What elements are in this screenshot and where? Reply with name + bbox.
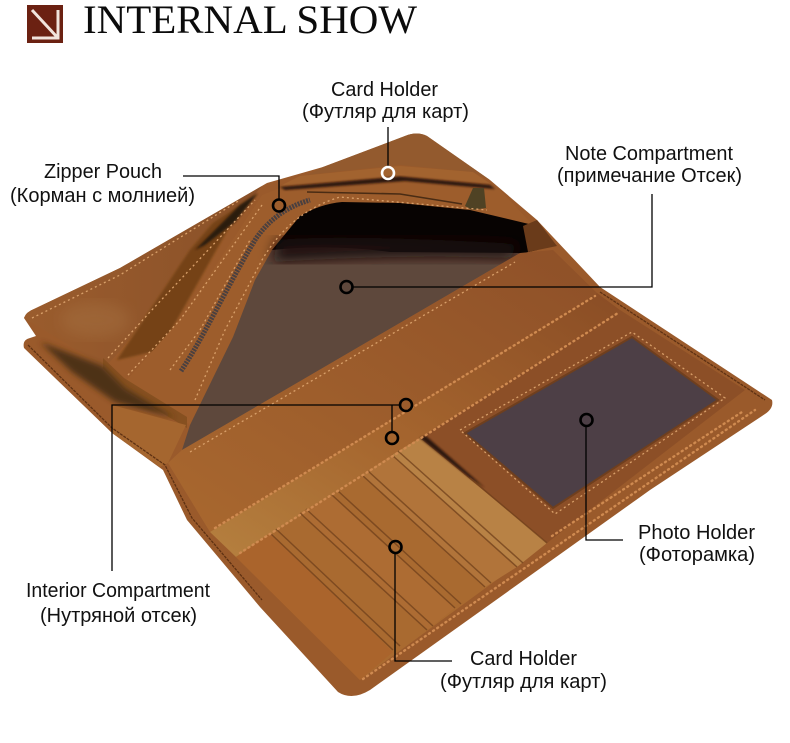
card tier edges xyxy=(270,451,547,650)
lining xyxy=(182,247,520,450)
label: note compartment xyxy=(557,143,742,187)
shadow under fold xyxy=(40,342,175,418)
card tier 1 xyxy=(236,533,393,680)
right fold tab xyxy=(523,220,557,252)
callout: note compartment xyxy=(340,194,652,293)
left flap light patch xyxy=(60,302,130,338)
top card slit xyxy=(280,176,495,190)
label: card holder bottom xyxy=(440,648,607,693)
lining shadow blend xyxy=(272,238,520,262)
zipper pull xyxy=(465,188,486,210)
label: card holder bottom: (Футляр для карт) xyxy=(440,671,607,693)
label: note compartment: (примечание Отсек) xyxy=(557,165,742,187)
zipper xyxy=(181,200,310,371)
wallet body silhouette xyxy=(24,134,772,696)
fold ridge xyxy=(103,358,187,428)
label: zipper pouch: Zipper Pouch xyxy=(44,161,162,183)
label: zipper pouch xyxy=(10,161,195,207)
card tier 3 xyxy=(300,495,455,630)
top back flap xyxy=(307,134,490,180)
label: interior compartment: (Нутряной отсек) xyxy=(40,605,197,627)
left pocket deep crease xyxy=(195,193,258,250)
callout: photo holder xyxy=(580,414,623,540)
left pocket band dark xyxy=(117,195,255,360)
card tier 6 (lightest) xyxy=(392,438,547,567)
label: photo holder: (Фоторамка) xyxy=(639,544,755,566)
callout: card holder bottom xyxy=(390,541,452,661)
window slit xyxy=(420,436,485,488)
label: interior compartment: Interior Compartment xyxy=(26,580,210,602)
fold lower panel xyxy=(112,405,186,467)
strip xyxy=(210,293,620,557)
label: card holder top: Card Holder xyxy=(331,79,438,101)
stitching xyxy=(32,197,755,679)
middle panel xyxy=(168,250,597,532)
shadow interior xyxy=(272,202,537,256)
callout: card holder top xyxy=(382,127,394,179)
label: photo holder: Photo Holder xyxy=(638,522,755,544)
right frame xyxy=(420,310,745,543)
label: photo holder xyxy=(638,522,755,566)
label: card holder bottom: Card Holder xyxy=(470,648,577,670)
label: card holder top xyxy=(302,79,469,123)
callout: zipper pouch xyxy=(183,176,285,212)
label: interior compartment xyxy=(26,580,210,627)
zipper track xyxy=(307,192,462,204)
label: note compartment: Note Compartment xyxy=(565,143,733,165)
left outer flap xyxy=(24,186,262,366)
label: card holder top: (Футляр для карт) xyxy=(302,101,469,123)
card slots xyxy=(236,438,547,680)
wallet illustration xyxy=(24,134,772,696)
zipper flap xyxy=(125,178,533,425)
label: zipper pouch: (Корман с молнией) xyxy=(10,185,195,207)
outer seam xyxy=(28,292,765,600)
card tier 5 xyxy=(362,455,517,587)
icon: title arrow square xyxy=(27,5,63,43)
top card slot 1 xyxy=(280,166,491,186)
photo window xyxy=(465,337,718,508)
callout: interior compartment xyxy=(112,399,412,571)
